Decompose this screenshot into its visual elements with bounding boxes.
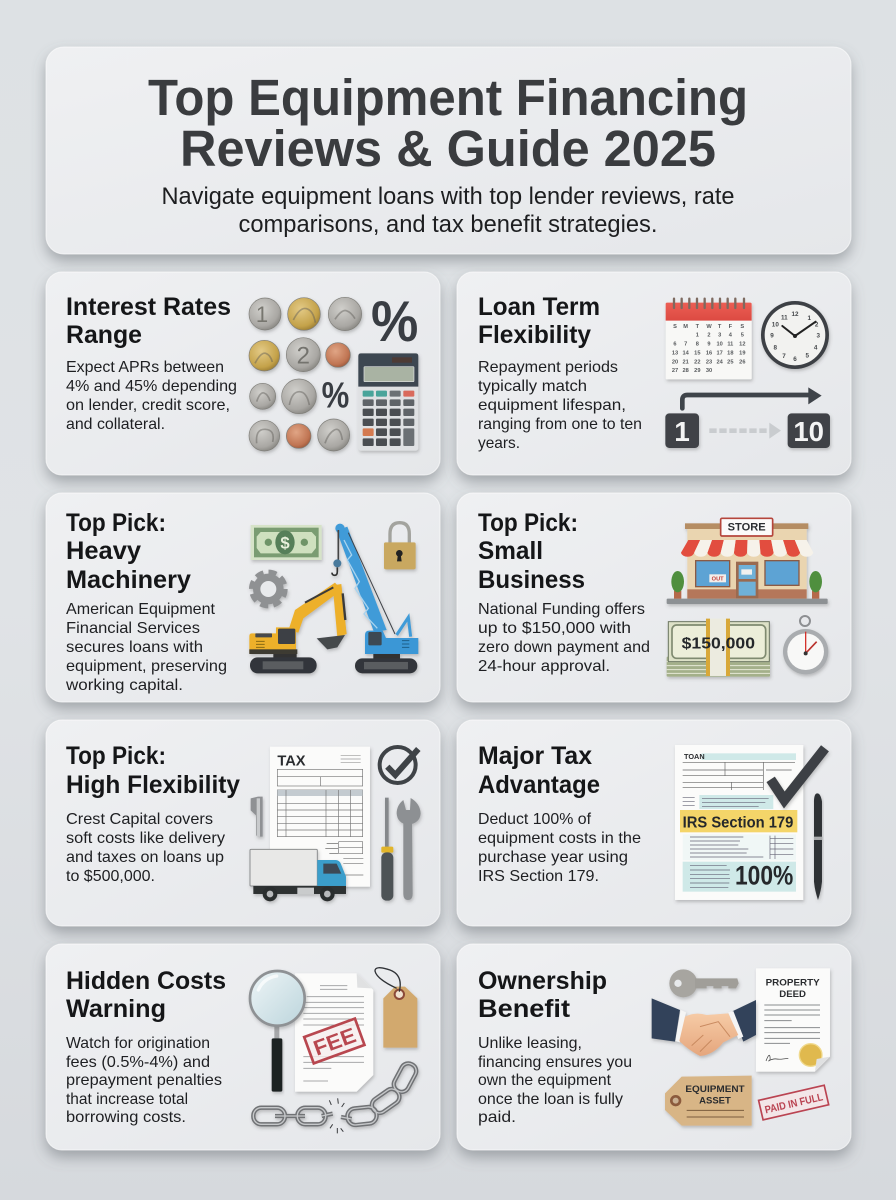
heading: Loan Term xyxy=(478,293,600,321)
body text: National Funding offers xyxy=(478,601,645,618)
icon: calendar, clock and 1 to 10 arrow: 1 xyxy=(674,416,690,447)
panel: header xyxy=(46,47,851,254)
panel: top pick small business xyxy=(457,493,851,702)
icon: calendar, clock and 1 to 10 arrow: 5 xyxy=(806,352,810,359)
heading xyxy=(478,509,585,594)
heading: Top Pick: xyxy=(478,509,578,537)
icon: calendar, clock and 1 to 10 arrow: 1 xyxy=(808,315,812,322)
icon: calendar, clock and 1 to 10 arrow: T xyxy=(696,324,700,330)
icon: calendar, clock and 1 to 10 arrow: 16 xyxy=(706,350,712,356)
body text: zero down payment and xyxy=(478,639,650,656)
heading: Machinery xyxy=(66,566,191,594)
heading: Major Tax xyxy=(478,742,592,770)
icon: calendar, clock and 1 to 10 arrow: 8 xyxy=(774,344,778,351)
icon: storefront, cash stack and stopwatch: OUT xyxy=(712,577,724,583)
body text: and taxes on loans up xyxy=(66,849,224,866)
heading xyxy=(478,967,607,1023)
icon: calendar, clock and 1 to 10 arrow: 28 xyxy=(683,368,689,374)
body text: Unlike leasing, xyxy=(478,1035,582,1052)
icon: calendar, clock and 1 to 10 arrow: 10 xyxy=(717,341,723,347)
icon: calendar, clock and 1 to 10 arrow: 24 xyxy=(717,359,724,365)
body text: once the loan is fully xyxy=(478,1091,623,1108)
heading xyxy=(66,967,226,1023)
icon: calendar, clock and 1 to 10 arrow: 25 xyxy=(727,359,733,365)
body text: Watch for origination xyxy=(66,1035,210,1052)
icon: calendar, clock and 1 to 10 arrow: 2 xyxy=(707,332,711,338)
panel: hidden costs warning xyxy=(46,944,440,1150)
body text: up to $150,000 with xyxy=(478,620,631,637)
body text xyxy=(65,601,227,694)
icon: calendar, clock and 1 to 10 arrow: 21 xyxy=(683,359,689,365)
body text: Crest Capital covers xyxy=(66,811,213,828)
icon: IRS form, check mark and pen: IRS Section 179 xyxy=(683,815,793,832)
heading: Top Pick: xyxy=(66,742,166,770)
body text xyxy=(478,359,642,452)
body text: Deduct 100% of xyxy=(478,811,592,828)
panel: ownership benefit xyxy=(457,944,851,1150)
icon: calendar, clock and 1 to 10 arrow: 11 xyxy=(727,341,733,347)
heading xyxy=(478,293,600,349)
body text: equipment lifespan, xyxy=(478,397,626,414)
icon: key, handshake, deed, tag and paid stamp xyxy=(652,968,830,1126)
icon: calendar, clock and 1 to 10 arrow: 4 xyxy=(729,332,733,338)
body text xyxy=(66,1035,222,1126)
icon: calendar, clock and 1 to 10 arrow: 20 xyxy=(672,359,678,365)
panel: loan term flexibility xyxy=(457,272,851,475)
panel: major tax advantage xyxy=(457,720,851,926)
icon: calendar, clock and 1 to 10 arrow: 12 xyxy=(739,341,745,347)
icon: calendar, clock and 1 to 10 arrow: 27 xyxy=(672,368,678,374)
icon: calendar, clock and 1 to 10 arrow: 5 xyxy=(741,332,744,338)
icon: calendar, clock and 1 to 10 arrow: M xyxy=(683,324,688,330)
icon: calendar, clock and 1 to 10 arrow: S xyxy=(740,324,744,330)
icon: calendar, clock and 1 to 10 arrow: 23 xyxy=(706,359,712,365)
heading xyxy=(478,742,600,799)
body text: own the equipment xyxy=(478,1072,612,1089)
icon: calendar, clock and 1 to 10 arrow: T xyxy=(718,324,722,330)
body text: equipment costs in the xyxy=(478,830,641,847)
title: Reviews & Guide 2025 xyxy=(180,120,716,177)
heading: Flexibility xyxy=(478,321,591,349)
icon: storefront, cash stack and stopwatch: $150,000 xyxy=(682,635,755,652)
icon: magnifier, fee document, tag and broken chain xyxy=(250,968,419,1133)
icon: calendar, clock and 1 to 10 arrow: 8 xyxy=(696,341,699,347)
icon: key, handshake, deed, tag and paid stamp: ASSET xyxy=(699,1095,731,1105)
icon: coins, percent signs and calculator: 2 xyxy=(297,342,310,369)
icon: coins, percent signs and calculator xyxy=(249,290,418,451)
body text: borrowing costs. xyxy=(66,1109,186,1126)
heading: Small xyxy=(478,537,543,565)
subtitle xyxy=(162,183,734,238)
heading: Heavy xyxy=(66,537,141,565)
body text: and collateral. xyxy=(66,416,165,433)
icon: key, handshake, deed, tag and paid stamp: DEED xyxy=(779,989,807,999)
icon: calendar, clock and 1 to 10 arrow: 1 xyxy=(696,332,699,338)
body text xyxy=(478,1035,632,1126)
icon: IRS form, check mark and pen: 100% xyxy=(735,860,793,890)
heading: Interest Rates xyxy=(66,293,231,321)
subtitle: comparisons, and tax benefit strategies. xyxy=(238,211,658,238)
body text: 4% and 45% depending xyxy=(66,378,237,395)
body text: Repayment periods xyxy=(478,359,618,376)
icon: coins, percent signs and calculator: 1 xyxy=(256,302,268,327)
icon: tax form, truck, check and tools: TAX xyxy=(277,754,306,770)
heading: Benefit xyxy=(478,995,571,1023)
icon: tax form, truck, check and tools xyxy=(250,747,421,901)
panel: top pick heavy machinery xyxy=(46,493,440,702)
icon: cash, lock, gear, excavator and crane xyxy=(249,523,418,673)
icon: calendar, clock and 1 to 10 arrow: 7 xyxy=(684,341,687,347)
body text xyxy=(478,811,641,885)
icon: calendar, clock and 1 to 10 arrow: S xyxy=(673,324,677,330)
body text: equipment, preserving xyxy=(66,658,227,675)
icon: calendar, clock and 1 to 10 arrow: W xyxy=(706,324,712,330)
icon: calendar, clock and 1 to 10 arrow: 29 xyxy=(694,368,700,374)
icon: key, handshake, deed, tag and paid stamp: EQUIPMENT xyxy=(685,1084,745,1094)
icon: calendar, clock and 1 to 10 arrow: 4 xyxy=(814,344,818,351)
icon: calendar, clock and 1 to 10 arrow: F xyxy=(729,324,733,330)
icon: calendar, clock and 1 to 10 arrow: 9 xyxy=(770,332,774,339)
icon: calendar, clock and 1 to 10 arrow: 19 xyxy=(739,350,745,356)
icon: calendar, clock and 1 to 10 arrow: 2 xyxy=(815,322,819,329)
icon: calendar, clock and 1 to 10 arrow: 6 xyxy=(793,356,797,363)
body text: that increase total xyxy=(66,1091,188,1108)
body text: ranging from one to ten xyxy=(478,416,642,433)
body text: purchase year using xyxy=(478,849,628,866)
heading xyxy=(66,742,240,799)
icon: calendar, clock and 1 to 10 arrow: 3 xyxy=(718,332,721,338)
heading: High Flexibility xyxy=(66,771,240,799)
body text: financing ensures you xyxy=(478,1054,632,1071)
body text: fees (0.5%-4%) and xyxy=(66,1054,210,1071)
heading: Range xyxy=(66,321,142,349)
icon: IRS form, check mark and pen xyxy=(675,745,825,900)
body text: paid. xyxy=(478,1109,516,1126)
body text: IRS Section 179. xyxy=(478,868,599,885)
heading: Top Pick: xyxy=(66,509,166,537)
body text: Financial Services xyxy=(66,620,200,637)
icon: magnifier, fee document, tag and broken chain: FEE xyxy=(310,1023,359,1061)
body text: on lender, credit score, xyxy=(66,397,230,414)
heading: Ownership xyxy=(478,967,607,995)
icon: calendar, clock and 1 to 10 arrow: 13 xyxy=(672,350,678,356)
body text: secures loans with xyxy=(66,639,203,656)
icon: calendar, clock and 1 to 10 arrow: 17 xyxy=(717,350,723,356)
body text: American Equipment xyxy=(66,601,216,618)
heading xyxy=(66,509,191,594)
panel: interest rates range xyxy=(46,272,440,475)
heading: Hidden Costs xyxy=(66,967,226,995)
icon: calendar, clock and 1 to 10 arrow xyxy=(665,299,830,448)
icon: calendar, clock and 1 to 10 arrow: 11 xyxy=(781,314,788,321)
title: Top Equipment Financing xyxy=(148,69,748,126)
body text xyxy=(66,359,237,433)
icon: key, handshake, deed, tag and paid stamp: PAID IN FULL xyxy=(764,1091,825,1116)
icon: calendar, clock and 1 to 10 arrow: 18 xyxy=(727,350,733,356)
icon: calendar, clock and 1 to 10 arrow: 9 xyxy=(707,341,711,347)
icon: key, handshake, deed, tag and paid stamp: PROPERTY xyxy=(766,978,820,988)
body text: Expect APRs between xyxy=(66,359,224,376)
icon: calendar, clock and 1 to 10 arrow: 22 xyxy=(694,359,700,365)
heading xyxy=(66,293,231,349)
body text: to $500,000. xyxy=(66,868,155,885)
body text: 24-hour approval. xyxy=(478,658,610,675)
icon: calendar, clock and 1 to 10 arrow: 15 xyxy=(694,350,700,356)
title xyxy=(148,69,748,177)
body text: working capital. xyxy=(65,677,183,694)
heading: Business xyxy=(478,566,585,594)
icon: storefront, cash stack and stopwatch xyxy=(667,518,828,677)
icon: coins, percent signs and calculator: % xyxy=(371,290,418,354)
icon: storefront, cash stack and stopwatch: STORE xyxy=(728,522,766,534)
icon: calendar, clock and 1 to 10 arrow: 10 xyxy=(772,322,779,329)
icon: cash, lock, gear, excavator and crane: $ xyxy=(280,533,290,552)
body text xyxy=(66,811,225,885)
icon: calendar, clock and 1 to 10 arrow: 30 xyxy=(706,368,712,374)
body text: typically match xyxy=(478,378,587,395)
heading: Advantage xyxy=(478,771,600,799)
subtitle: Navigate equipment loans with top lender reviews, rate xyxy=(162,183,734,210)
panel: top pick high flexibility xyxy=(46,720,440,926)
icon: calendar, clock and 1 to 10 arrow: 26 xyxy=(739,359,745,365)
body text: prepayment penalties xyxy=(66,1072,222,1089)
icon: IRS form, check mark and pen: TOAN xyxy=(684,752,705,761)
icon: calendar, clock and 1 to 10 arrow: 6 xyxy=(673,341,677,347)
icon: calendar, clock and 1 to 10 arrow: 12 xyxy=(791,311,799,318)
body text xyxy=(478,601,650,675)
heading: Warning xyxy=(66,995,166,1023)
icon: coins, percent signs and calculator: % xyxy=(322,375,349,416)
icon: calendar, clock and 1 to 10 arrow: 7 xyxy=(782,353,786,360)
body text: years. xyxy=(478,435,520,452)
icon: calendar, clock and 1 to 10 arrow: 14 xyxy=(683,350,690,356)
icon: calendar, clock and 1 to 10 arrow: 3 xyxy=(817,332,821,339)
body text: soft costs like delivery xyxy=(66,830,225,847)
icon: calendar, clock and 1 to 10 arrow: 10 xyxy=(793,416,824,447)
